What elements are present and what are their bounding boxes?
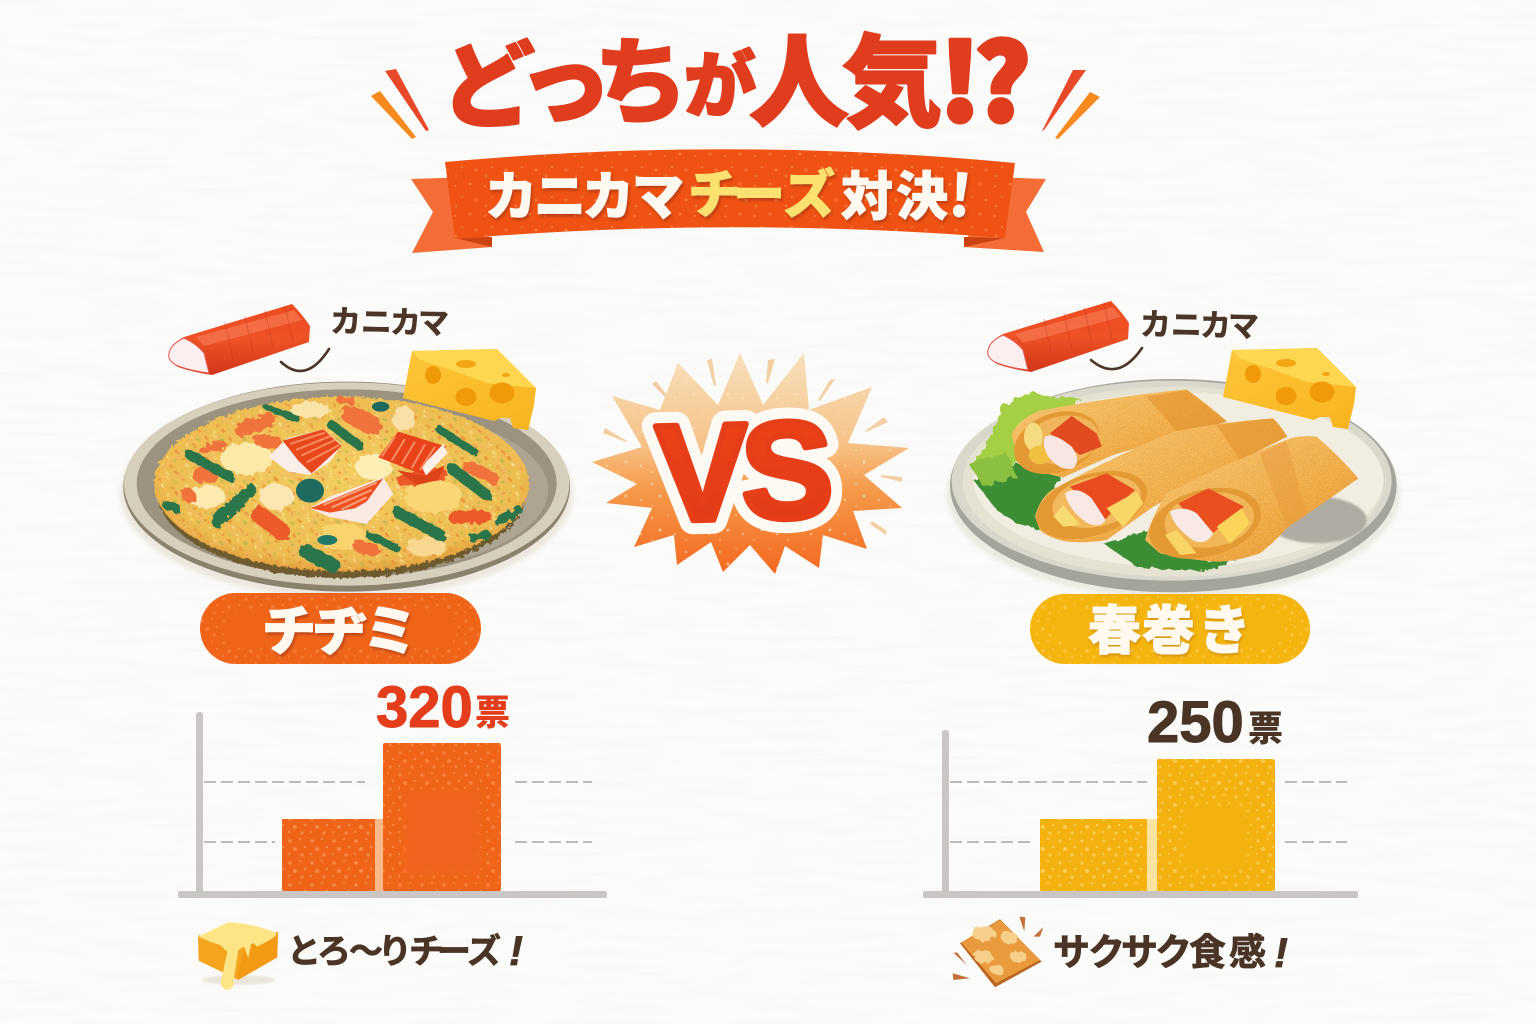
lettuce [968, 392, 1237, 570]
title text: ? [974, 0, 1031, 152]
pill: チヂミ [200, 587, 481, 666]
vote value: 票 [475, 685, 510, 736]
left title accent ticks [371, 69, 429, 139]
bar gap highlight [1147, 819, 1159, 891]
title text: 気 [842, 2, 942, 147]
bar chart: チヂミ [178, 675, 607, 898]
right title accent ticks [1042, 70, 1100, 139]
bar: large [383, 743, 501, 891]
pill label: 春巻き [1088, 589, 1251, 665]
title text: 人 [749, 2, 849, 147]
caption text: とろ〜りチーズ [287, 924, 501, 973]
spring roll: front [1141, 436, 1358, 570]
cheese wedge [1223, 348, 1356, 429]
VS burst [592, 353, 909, 574]
title [371, 0, 1100, 152]
axes [923, 730, 1358, 898]
pointer arc [281, 349, 329, 371]
icon: crispy wrapper [953, 917, 1043, 987]
pill label: チヂミ [262, 587, 417, 666]
VS text: VS [654, 393, 830, 551]
spring roll: middle [1028, 418, 1287, 552]
ribbon tails [411, 177, 1046, 253]
vote value: 250 [1147, 690, 1244, 755]
ribbon text: 対決 [841, 155, 948, 230]
crab stick [988, 301, 1129, 372]
bar gap highlight [375, 819, 387, 891]
pointer arc [1091, 348, 1142, 369]
title text: っ [518, 8, 612, 144]
crab label: カニカマ [330, 296, 449, 343]
bar: small [1040, 819, 1147, 891]
crab label: カニカマ [1140, 299, 1259, 346]
caption text: サクサク食感 [1053, 922, 1266, 976]
ribbon text: チーズ [688, 153, 835, 228]
bar chart: 春巻き [923, 690, 1358, 898]
crab pieces [269, 429, 447, 524]
pill: 春巻き [1030, 589, 1310, 665]
ribbon text: ! [946, 149, 976, 234]
VS text: VS [654, 393, 830, 551]
title text: ど [441, 11, 535, 147]
title text: が [684, 27, 756, 132]
plate [947, 379, 1400, 598]
plate [120, 382, 573, 598]
vote value: 票 [1248, 701, 1283, 752]
caption text: ! [1274, 929, 1288, 976]
ribbon text [485, 149, 976, 234]
spring roll: back [1005, 389, 1227, 485]
burst rays [592, 353, 909, 574]
panel: チヂミ [120, 296, 573, 598]
caption: サクサク食感 [953, 917, 1288, 987]
panel: 春巻き [947, 299, 1400, 598]
ribbon body [445, 149, 1015, 239]
ribbon text: カニカマ [485, 155, 684, 230]
vote value: 320 [376, 675, 473, 740]
icon: melting cheese cube [198, 922, 277, 990]
title text: ! [939, 0, 981, 152]
bar: small [282, 819, 375, 891]
pancake [154, 397, 529, 578]
crab stick [169, 304, 310, 375]
axes [178, 712, 607, 898]
title text: ち [594, 7, 688, 143]
caption text: ! [509, 927, 523, 974]
caption: とろ〜りチーズ [198, 922, 523, 990]
bar: large [1157, 759, 1275, 891]
ribbon banner [411, 149, 1046, 253]
cheese wedge [403, 349, 536, 430]
